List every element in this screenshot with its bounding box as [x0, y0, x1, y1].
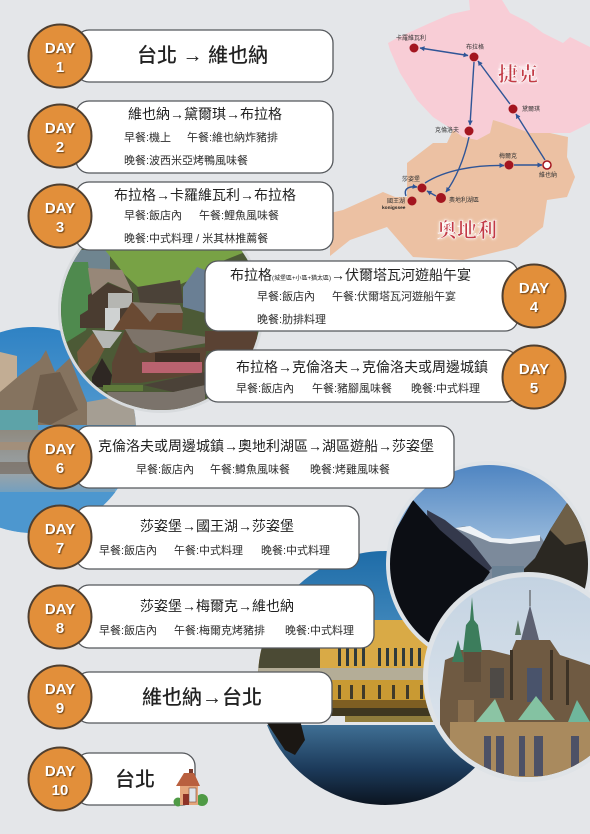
city labels: 莎姿堡 — [402, 175, 420, 183]
day 4 meals: 午餐:伏爾塔瓦河遊船午宴 — [332, 289, 456, 303]
city labels: 卡羅維瓦利 — [396, 34, 426, 42]
day 7 meals: 早餐:飯店內 — [99, 543, 157, 557]
day 3 badge: 3 — [56, 219, 64, 236]
day 8 badge — [28, 586, 92, 648]
city labels: konigssee — [382, 205, 406, 211]
day 2 meals: 晚餐:波西米亞烤鴨風味餐 — [124, 153, 248, 167]
day 4 badge: 4 — [530, 299, 539, 316]
city labels: 克倫洛夫 — [435, 126, 459, 134]
day 9 badge: DAY — [45, 681, 75, 698]
day 10 box — [76, 753, 195, 805]
city labels: 梅爾克 — [499, 152, 517, 160]
route arrows — [405, 48, 545, 196]
day 8 route: 莎姿堡→梅爾克→維也納 — [140, 598, 294, 614]
day 5 meals: 早餐:飯店內 — [236, 381, 294, 395]
day 10 — [28, 748, 208, 810]
day 5 meals — [236, 381, 480, 395]
day 6 — [28, 426, 454, 488]
day 2 box — [76, 101, 333, 173]
city markers — [408, 44, 551, 206]
day 9 route: 維也納→台北 — [142, 686, 262, 709]
city labels: 維也納 — [539, 171, 557, 179]
day 4 — [205, 261, 566, 331]
day 3 box — [76, 182, 333, 250]
day 6 badge: 6 — [56, 460, 64, 477]
day 6 box — [76, 426, 454, 488]
photo: Konigssee lake mountains — [386, 465, 588, 647]
day 7 route: 莎姿堡→國王湖→莎姿堡 — [140, 518, 294, 534]
photo: St. Vitus Cathedral — [423, 572, 590, 782]
day 3 badge — [28, 184, 92, 248]
day 1 — [28, 24, 333, 88]
day 7 meals: 晚餐:中式料理 — [261, 543, 330, 557]
day 7 — [28, 506, 359, 569]
city labels: 布拉格 — [466, 43, 484, 51]
day 5 meals: 晚餐:中式料理 — [411, 381, 480, 395]
map region: Austria — [330, 120, 575, 260]
city labels: 黛爾琪 — [522, 105, 540, 113]
day 10 badge: 10 — [52, 782, 68, 799]
map: Czech and Austria route — [330, 0, 590, 260]
day 2 meals: 早餐:機上 — [124, 130, 171, 144]
day 8 — [28, 585, 374, 648]
day 2 — [28, 101, 333, 173]
day 9 badge: 9 — [56, 700, 64, 717]
day 1 badge: 1 — [56, 59, 64, 76]
day 5 — [205, 346, 566, 408]
day 3 meals: 午餐:鯉魚風味餐 — [199, 208, 279, 222]
day 7 badge — [28, 506, 92, 568]
day 10 badge: DAY — [45, 763, 75, 780]
day 2 badge — [28, 104, 92, 168]
day 6 badge: DAY — [45, 441, 75, 458]
day 3 meals: 早餐:飯店內 — [124, 208, 182, 222]
day 3 — [28, 182, 333, 250]
day 4 badge — [502, 264, 566, 328]
day 9 box — [76, 672, 332, 723]
day 8 meals — [99, 623, 354, 637]
day 1 badge — [28, 24, 92, 88]
day 8 meals: 晚餐:中式料理 — [285, 623, 354, 637]
day 6 badge — [28, 426, 92, 488]
day 2 badge: 2 — [56, 139, 64, 156]
photo: lake town — [0, 327, 140, 542]
map region: Czech Republic — [388, 0, 590, 140]
day 6 meals: 早餐:飯店內 — [136, 462, 194, 476]
day 6 meals — [136, 462, 390, 476]
day 4 box — [205, 261, 518, 331]
day 4 route: 布拉格(城堡區+小區+猶太區)→伏爾塔瓦河遊船午宴 — [230, 267, 471, 283]
day 8 badge: 8 — [56, 620, 64, 637]
day 5 badge — [502, 346, 566, 408]
day 8 badge: DAY — [45, 601, 75, 618]
day 7 badge: 7 — [56, 540, 64, 557]
day 2 badge: DAY — [45, 120, 75, 137]
country label: Austria: 奧地利 — [437, 218, 497, 242]
photo: Hallstatt village — [58, 247, 262, 413]
icon: house — [174, 769, 208, 806]
day 9 — [28, 666, 332, 728]
day 5 badge: DAY — [519, 361, 549, 378]
day 4 meals: 晚餐:肋排料理 — [257, 312, 326, 326]
day 3 badge: DAY — [45, 200, 75, 217]
day 8 box — [76, 585, 374, 648]
day 3 route: 布拉格→卡羅維瓦利→布拉格 — [114, 187, 296, 203]
day 2 meals — [124, 130, 278, 167]
day 10 destination: 台北 — [115, 768, 155, 791]
day 8 meals: 午餐:梅爾克烤豬排 — [174, 623, 265, 637]
day 6 meals: 晚餐:烤雞風味餐 — [310, 462, 390, 476]
day 8 meals: 早餐:飯店內 — [99, 623, 157, 637]
day 1 route: 台北 → 維也納 — [137, 44, 268, 67]
country label: Czech: 捷克 — [498, 62, 538, 86]
day 7 meals — [99, 543, 330, 557]
day 1 box — [76, 30, 333, 82]
day 6 meals: 午餐:鱒魚風味餐 — [210, 462, 290, 476]
day 7 meals: 午餐:中式料理 — [174, 543, 243, 557]
day 5 box — [205, 350, 518, 402]
photo: Schonbrunn Palace reflection — [258, 551, 475, 805]
day 7 badge: DAY — [45, 521, 75, 538]
day 6 route: 克倫洛夫或周邊城鎮→奧地利湖區→湖區遊船→莎姿堡 — [98, 438, 434, 454]
day 4 badge: DAY — [519, 280, 549, 297]
city labels: 國王湖 — [387, 197, 405, 205]
day 10 badge — [28, 748, 92, 810]
day 5 badge: 5 — [530, 380, 538, 397]
day 3 meals — [124, 208, 279, 245]
day 4 meals: 早餐:飯店內 — [257, 289, 315, 303]
city labels: 奧地利湖區 — [449, 196, 479, 204]
day 4 meals — [257, 289, 456, 326]
day 1 badge: DAY — [45, 40, 75, 57]
day 5 route: 布拉格→克倫洛夫→克倫洛夫或周邊城鎮 — [236, 359, 488, 375]
day 5 meals: 午餐:豬腳風味餐 — [312, 381, 392, 395]
day 9 badge — [28, 666, 92, 728]
day 3 meals: 晚餐:中式料理 / 米其林推薦餐 — [124, 231, 268, 245]
city labels — [382, 34, 557, 211]
day 2 route: 維也納→黛爾琪→布拉格 — [128, 106, 282, 122]
day 2 meals: 午餐:維也納炸豬排 — [187, 130, 278, 144]
day 7 box — [76, 506, 359, 569]
